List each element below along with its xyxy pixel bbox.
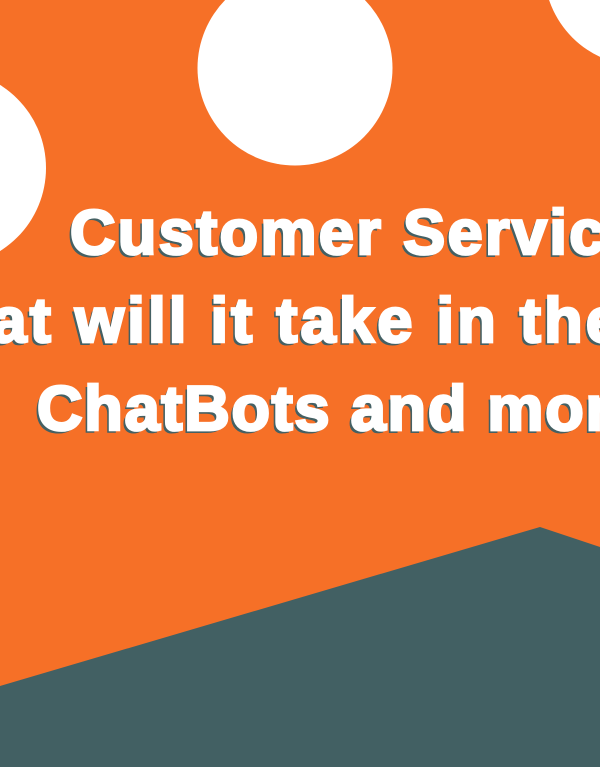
circle: left <box>0 70 46 266</box>
circle: top right <box>544 0 600 66</box>
teal ground shape <box>0 527 600 767</box>
circle: top centre <box>198 0 392 166</box>
